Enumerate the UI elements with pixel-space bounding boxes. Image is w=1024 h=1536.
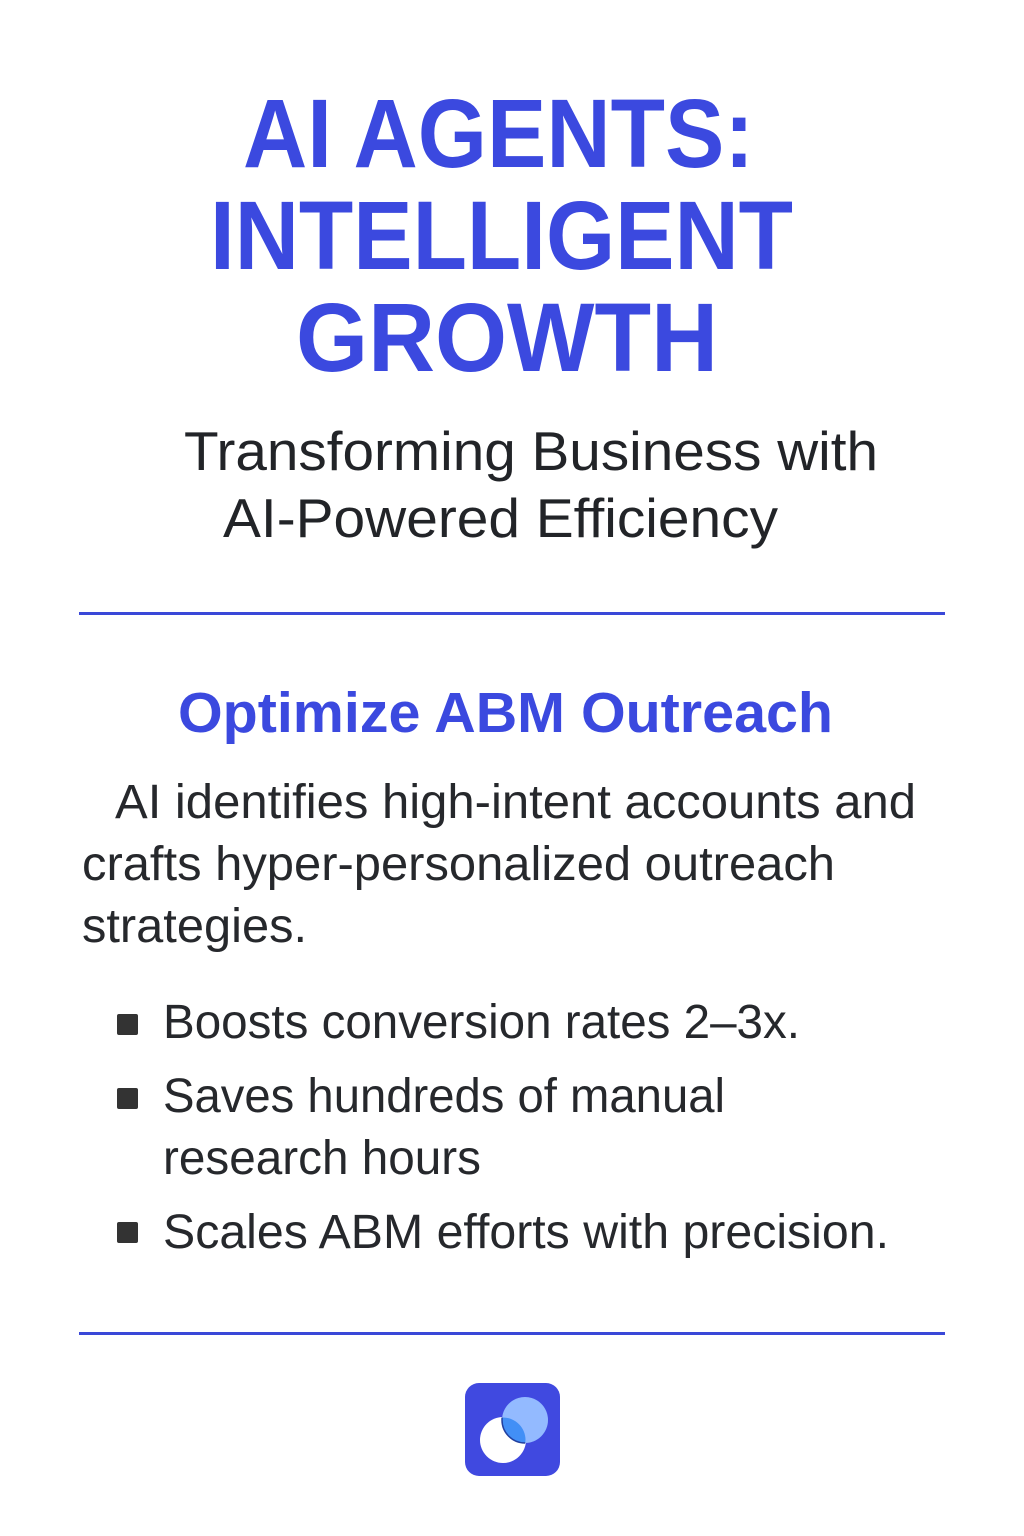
bullet list <box>117 996 889 1259</box>
body text <box>82 776 916 953</box>
bullet: conversion rates: Boosts conversion rates 2–3x. <box>163 996 800 1049</box>
title <box>210 79 793 392</box>
subtitle: AI-Powered Efficiency <box>223 487 779 549</box>
body text: AI identifies high-intent accounts and <box>115 776 916 829</box>
title: GROWTH <box>296 283 718 392</box>
title: AI AGENTS: <box>243 79 754 188</box>
subtitle <box>184 420 878 549</box>
body text: crafts hyper-personalized outreach <box>82 838 835 891</box>
bullet: research hours <box>117 1070 725 1185</box>
section heading: Optimize ABM Outreach <box>178 681 833 745</box>
subtitle: Transforming Business with <box>184 420 878 482</box>
bullet: scales ABM: Scales ABM efforts with precision. <box>163 1206 889 1259</box>
body text: strategies. <box>82 900 307 953</box>
bullet: research hours: research hours <box>163 1132 481 1185</box>
bullet: research hours: Saves hundreds of manual <box>163 1070 725 1123</box>
icon: overlapping circles logo <box>465 1383 560 1476</box>
title: INTELLIGENT <box>210 181 793 290</box>
